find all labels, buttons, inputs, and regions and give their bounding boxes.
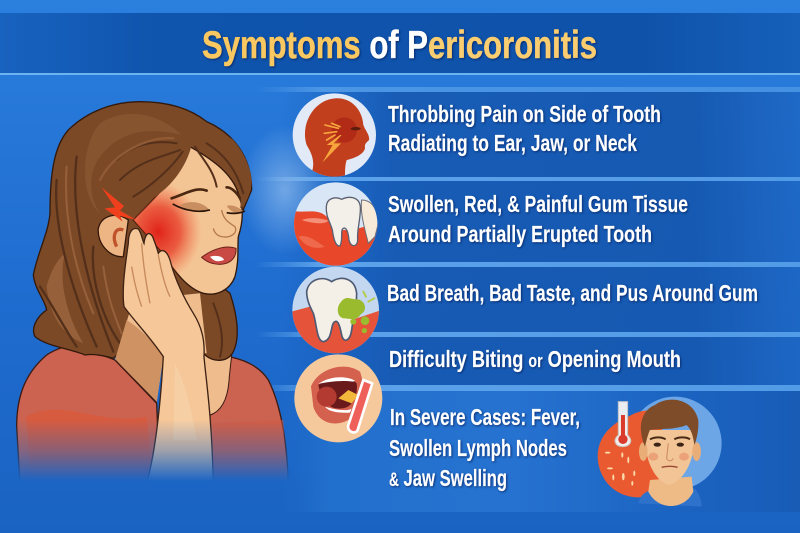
front hair — [154, 138, 252, 208]
icon: open mouth with thermometer — [294, 354, 382, 442]
neck — [115, 293, 207, 403]
brows and closed eyes — [172, 187, 242, 202]
face — [133, 147, 242, 294]
back hair — [33, 102, 252, 360]
title band — [0, 13, 800, 73]
text: throbbing pain: Radiating to Ear, Jaw, or Neck — [388, 130, 637, 156]
mouth — [202, 247, 236, 264]
hand and wrist — [123, 229, 213, 483]
text: throbbing pain — [388, 101, 661, 156]
icon: man with fever — [598, 397, 722, 507]
icon: lightning bolt — [102, 187, 137, 222]
nose — [213, 210, 236, 237]
text: difficulty biting: Difficulty Biting or Opening Mouth — [389, 346, 681, 372]
text: severe cases: In Severe Cases: Fever, — [390, 404, 580, 430]
text: swollen gum: Around Partially Erupted Tooth — [388, 221, 652, 247]
title: Symptoms of Pericoronitis — [202, 24, 597, 67]
icon: swollen gum and tooth — [292, 182, 378, 270]
text: severe cases: Swollen Lymph Nodes — [389, 435, 567, 461]
ear — [98, 215, 128, 257]
text: throbbing pain: Throbbing Pain on Side of Tooth — [388, 101, 661, 127]
text: severe cases — [389, 404, 580, 491]
panel: symptom rows — [255, 87, 800, 512]
pain glow on cheek — [134, 186, 200, 274]
hair shading — [40, 114, 222, 357]
text: swollen gum — [388, 191, 688, 247]
shirt — [17, 345, 288, 483]
icon: head profile with pain — [293, 93, 376, 178]
illustration: woman with jaw pain — [17, 102, 288, 483]
text: severe cases: & Jaw Swelling — [389, 465, 507, 491]
glow behind face — [240, 125, 330, 255]
chest — [204, 354, 232, 416]
text: swollen gum: Swollen, Red, & Painful Gum Tissue — [388, 191, 688, 217]
icon: tooth with pus — [292, 267, 382, 357]
